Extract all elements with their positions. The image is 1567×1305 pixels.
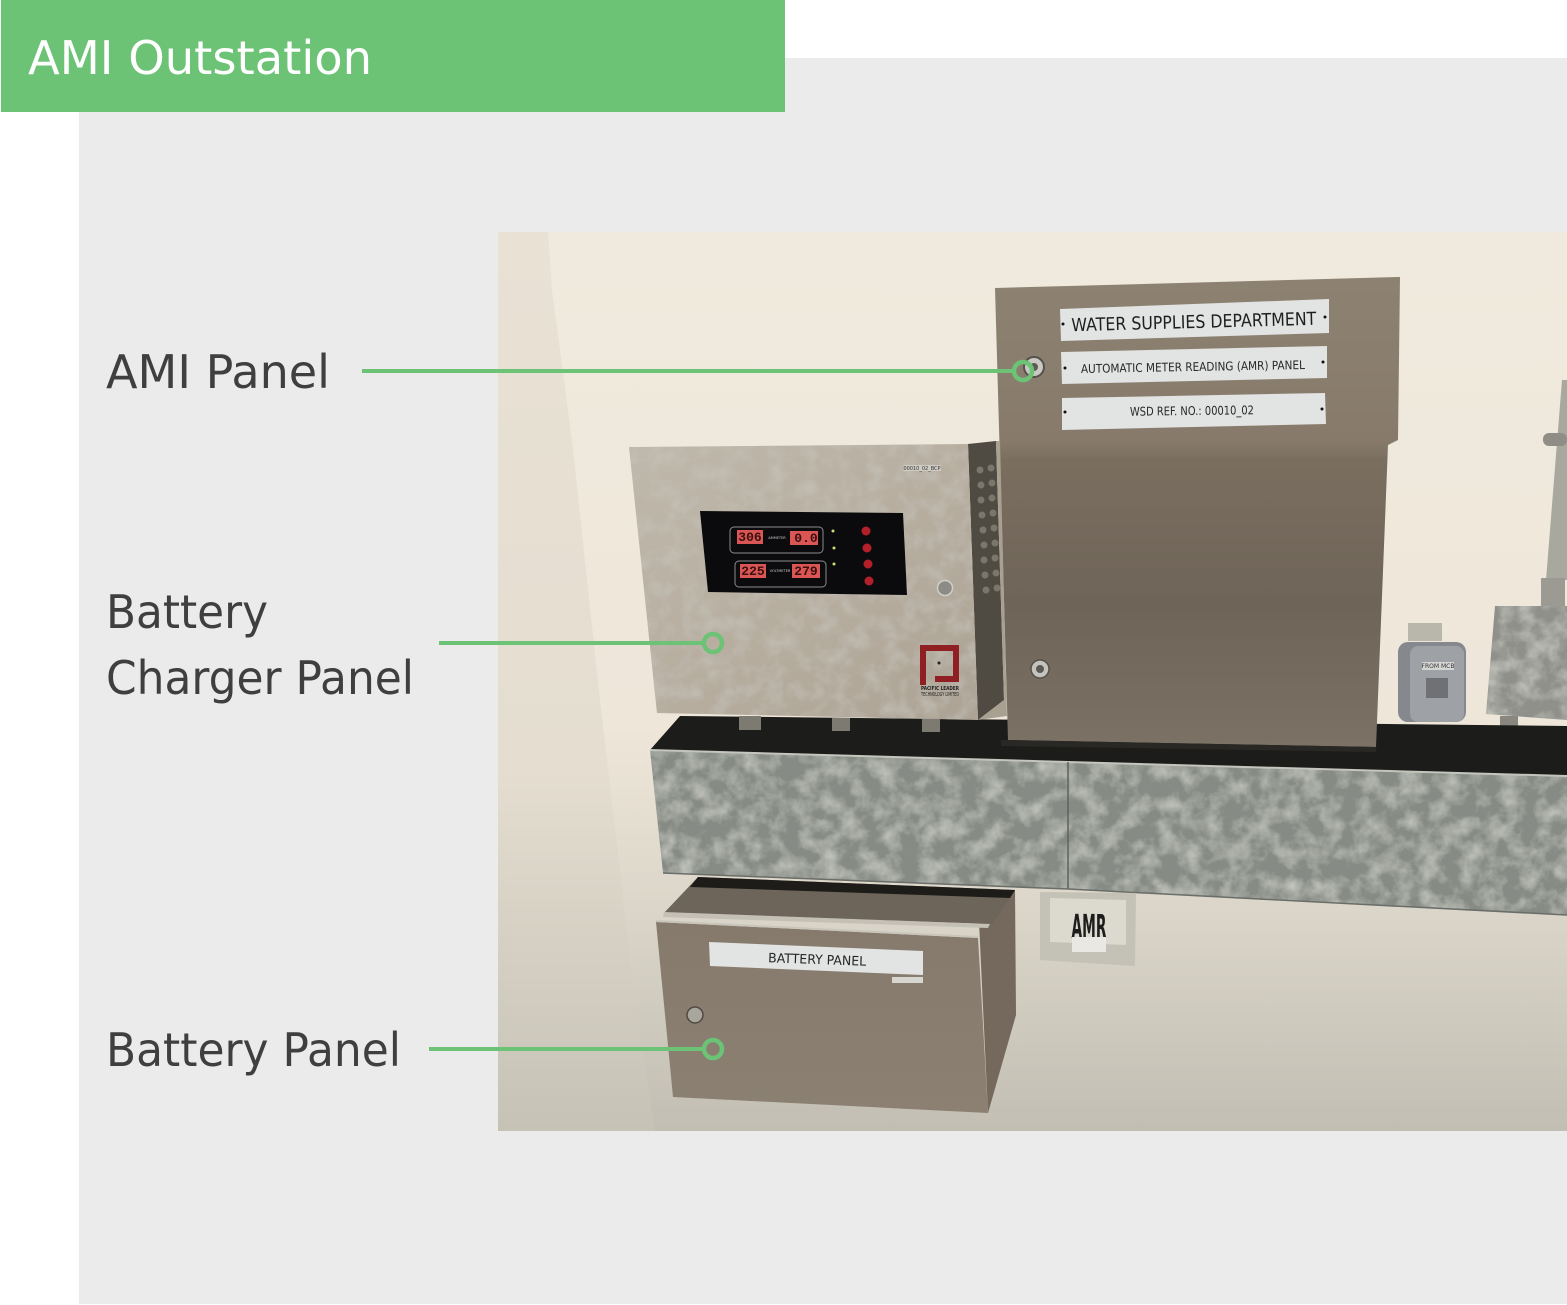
metal duct — [650, 716, 1567, 915]
battery charger panel: AMMETER — [768, 536, 786, 540]
title banner: AMI Outstation — [28, 31, 372, 85]
battery charger panel: 279 — [794, 564, 818, 579]
photo of the AMI outstation equipment — [498, 232, 1567, 1131]
battery panel: BATTERY PANEL — [768, 951, 867, 970]
battery charger panel: 00010_02_BCP — [903, 466, 941, 472]
nameplates: AUTOMATIC METER READING (AMR) PANEL — [1081, 358, 1305, 376]
logo: TECHNOLOGY LIMITED — [920, 692, 959, 698]
battery charger panel — [629, 441, 1007, 732]
nameplates: WATER SUPPLIES DEPARTMENT — [1071, 309, 1317, 336]
battery charger panel: 0.0 — [794, 531, 818, 546]
asset tag — [904, 465, 941, 471]
AMR sign — [1040, 892, 1136, 966]
conduit and socket at right — [1398, 380, 1567, 738]
battery charger panel: 225 — [741, 564, 765, 579]
logo — [920, 645, 960, 698]
key lock — [938, 580, 952, 596]
label: Battery Panel with leader: Battery Panel — [106, 1023, 401, 1077]
nameplates: WSD REF. NO.: 00010_02 — [1130, 403, 1254, 419]
AMR sign: AMR — [1072, 907, 1106, 946]
locks — [1024, 357, 1044, 377]
label: AMI Panel with leader: AMI Panel — [106, 345, 330, 399]
logo: PACIFIC LEADER — [921, 686, 960, 692]
conduit and socket at right: FROM MCB — [1422, 663, 1454, 670]
nameplates — [1060, 299, 1329, 430]
label: Battery Charger Panel with leader — [106, 585, 722, 705]
label: AMI Panel with leader — [106, 345, 1032, 399]
AMI panel — [995, 277, 1400, 752]
battery charger panel: 306 — [738, 530, 762, 545]
feet — [739, 716, 761, 730]
title banner — [1, 0, 785, 112]
label: Battery Panel with leader — [106, 1023, 722, 1077]
control display — [700, 511, 907, 595]
battery panel — [656, 877, 1016, 1113]
label: Battery Charger Panel with leader: Charger Panel — [106, 651, 414, 705]
battery charger panel: VOLTMETER — [770, 569, 791, 573]
label: Battery Charger Panel with leader: Battery — [106, 585, 268, 639]
